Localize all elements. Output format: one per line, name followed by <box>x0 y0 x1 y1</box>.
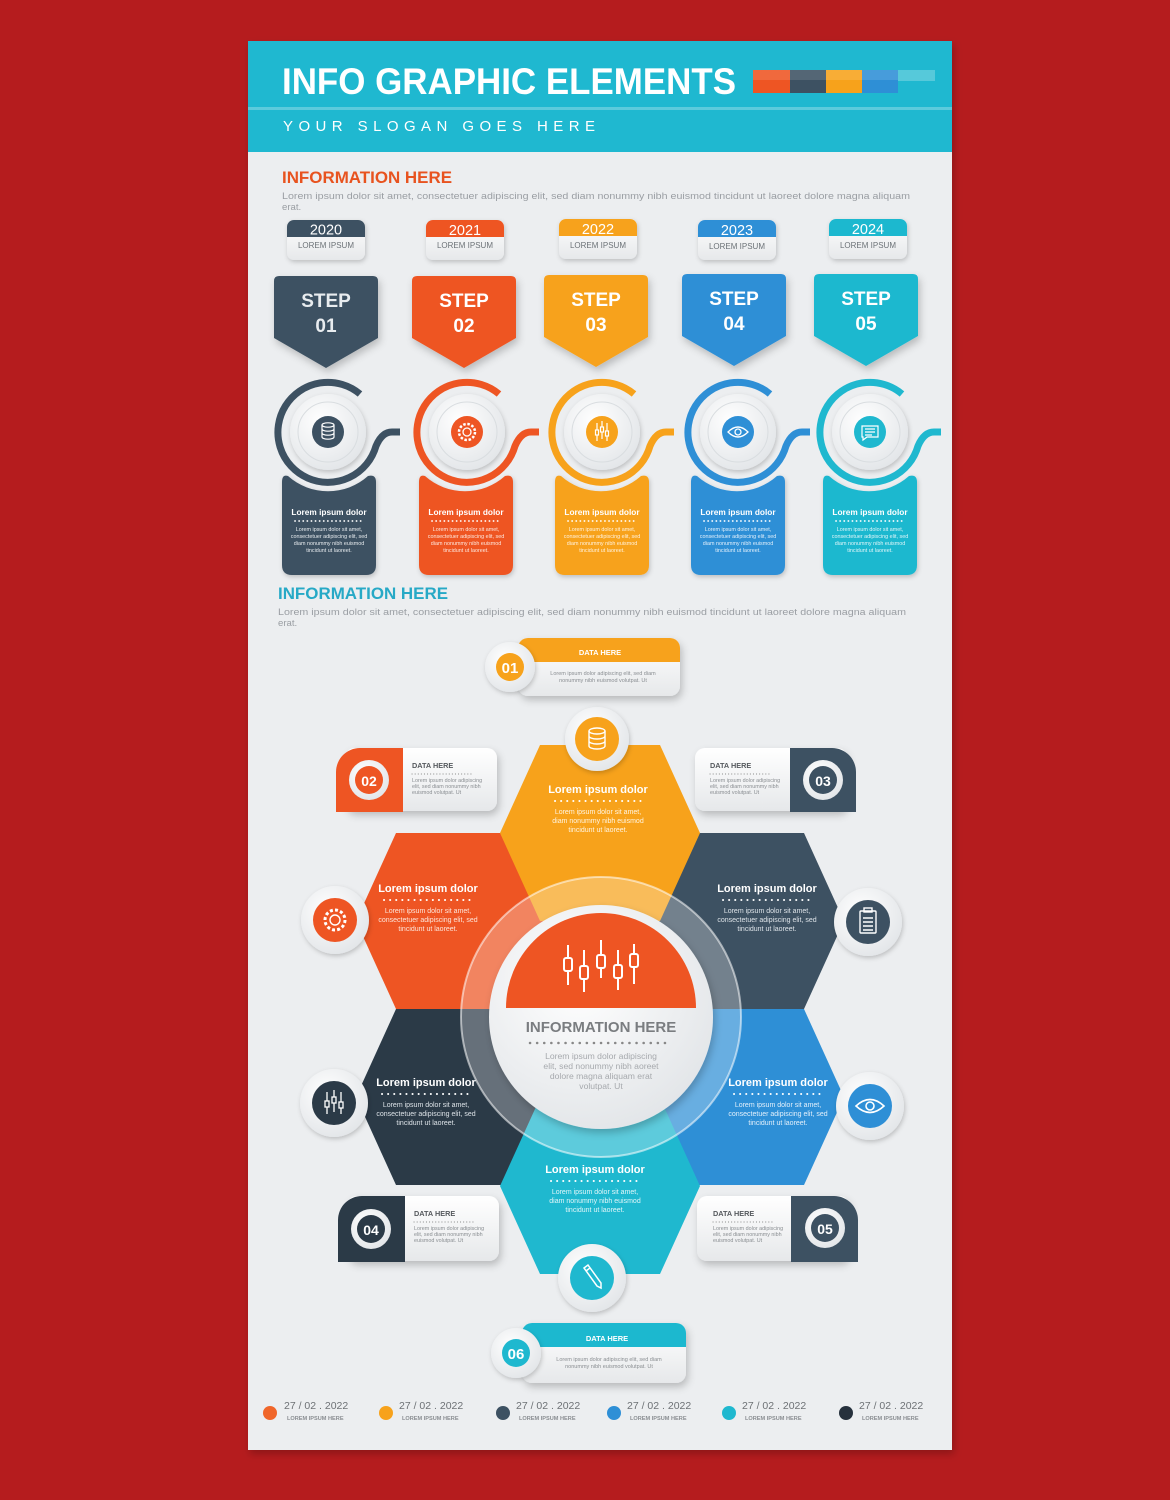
hex text: upper-left: Lorem ipsum dolor <box>378 883 479 895</box>
year tabs: LOREM IPSUM <box>709 242 765 251</box>
center circle: volutpat. Ut <box>579 1081 623 1091</box>
step 1 ring and card: consectetuer adipiscing elit, sed <box>291 534 367 540</box>
hex: lower-right blue <box>644 1009 844 1185</box>
step 2 ring and card: Lorem ipsum dolor sit amet, <box>433 527 500 533</box>
center circle: INFORMATION HERE <box>526 1019 676 1036</box>
hex icon: top database <box>565 707 629 771</box>
step badges: 04 <box>723 314 745 335</box>
year tabs: 2020 <box>310 222 342 238</box>
hex text: top: Lorem ipsum dolor <box>548 784 649 796</box>
data box 02: elit, sed diam nonummy nibh <box>412 784 481 790</box>
center circle: elit, sed nonummy nibh aoreet <box>543 1061 659 1071</box>
step 3 ring and card <box>552 382 674 575</box>
data box 05: 05 <box>817 1221 833 1237</box>
hex: lower-left navy <box>356 1009 556 1185</box>
hex icon: gear <box>301 886 369 954</box>
step 2 ring and card: tincidunt ut laoreet. <box>443 548 489 554</box>
bottom legend: 27 / 02 . 2022 <box>742 1400 806 1412</box>
step 2 ring and card: Lorem ipsum dolor <box>428 507 504 517</box>
data box 06: DATA HERE <box>586 1334 628 1343</box>
section heading 1 <box>282 169 910 213</box>
step 5 ring and card: Lorem ipsum dolor sit amet, <box>837 527 904 533</box>
hex icon: clipboard <box>834 888 902 956</box>
year tabs: 2022 <box>582 222 614 238</box>
data box 05: DATA HERE <box>713 1209 754 1218</box>
data box 05: euismod volutpat. Ut <box>713 1238 763 1244</box>
step 5 ring and card <box>820 382 941 575</box>
center circle <box>461 877 741 1157</box>
section heading 2: erat. <box>278 618 297 629</box>
data box 01: nonummy nibh euismod volutpat. Ut <box>559 678 647 684</box>
year tabs: 2024 <box>852 222 884 238</box>
hex icon: sliders dark <box>300 1069 368 1137</box>
data box 05: Lorem ipsum dolor adipiscing <box>713 1226 783 1232</box>
bottom legend: 27 / 02 . 2022 <box>859 1400 923 1412</box>
bottom legend: 27 / 02 . 2022 <box>627 1400 691 1412</box>
center circle: Lorem ipsum dolor adipiscing <box>545 1051 657 1061</box>
bottom legend: LOREM IPSUM HERE <box>745 1416 802 1422</box>
step 3 ring and card: Lorem ipsum dolor sit amet, <box>569 527 636 533</box>
hex text: top: tincidunt ut laoreet. <box>568 827 628 834</box>
hex text: lower-left: Lorem ipsum dolor sit amet, <box>383 1102 469 1109</box>
hex text: upper-right: Lorem ipsum dolor <box>717 883 818 895</box>
hex: top yellow <box>500 745 700 921</box>
section heading 2: INFORMATION HERE <box>278 585 448 603</box>
data box 06: 06 <box>508 1346 524 1363</box>
bottom legend: 27 / 02 . 2022 <box>284 1400 348 1412</box>
data box 05 <box>697 1196 858 1262</box>
color blocks <box>753 70 935 93</box>
step 5 ring and card: Lorem ipsum dolor <box>832 507 908 517</box>
data box 03: elit, sed diam nonummy nibh <box>710 784 779 790</box>
step 2 ring and card: consectetuer adipiscing elit, sed <box>428 534 504 540</box>
step badges: 03 <box>585 315 607 336</box>
step 5 ring and card: diam nonummy nibh euismod <box>835 541 905 547</box>
data box 01: Lorem ipsum dolor adipiscing elit, sed diam <box>550 671 656 677</box>
step 5 ring and card: consectetuer adipiscing elit, sed <box>832 534 908 540</box>
step 2 ring and card <box>417 382 539 575</box>
data box 02: DATA HERE <box>412 761 453 770</box>
data box 03: euismod volutpat. Ut <box>710 790 760 796</box>
data box 04 <box>338 1196 499 1262</box>
data box 06: nonummy nibh euismod volutpat. Ut <box>565 1364 653 1370</box>
data box 03 <box>695 748 856 812</box>
data box 04: euismod volutpat. Ut <box>414 1238 464 1244</box>
data box 03: Lorem ipsum dolor adipiscing <box>710 778 780 784</box>
page panel <box>248 41 952 1450</box>
bottom legend: LOREM IPSUM HERE <box>287 1416 344 1422</box>
section heading 2 <box>278 585 906 629</box>
year tabs: 2023 <box>721 223 753 239</box>
data box 02: Lorem ipsum dolor adipiscing <box>412 778 482 784</box>
step 2 ring and card: diam nonummy nibh euismod <box>431 541 501 547</box>
year tabs: LOREM IPSUM <box>298 241 354 250</box>
section heading 1: erat. <box>282 202 301 213</box>
bottom legend: LOREM IPSUM HERE <box>630 1416 687 1422</box>
hex text: lower-right: Lorem ipsum dolor sit amet, <box>735 1102 821 1109</box>
data box 02: euismod volutpat. Ut <box>412 790 462 796</box>
hex text: upper-right <box>717 883 818 933</box>
hex icon: eye <box>836 1072 904 1140</box>
step badges: 05 <box>855 314 877 335</box>
icon: chat bubble <box>862 426 878 440</box>
step badges: STEP <box>301 291 351 312</box>
step 4 ring and card: diam nonummy nibh euismod <box>703 541 773 547</box>
hex text: upper-left: tincidunt ut laoreet. <box>398 926 458 933</box>
step 1 ring and card: diam nonummy nibh euismod <box>294 541 364 547</box>
year tabs: 2021 <box>449 223 481 239</box>
bottom legend: LOREM IPSUM HERE <box>862 1416 919 1422</box>
icon: gear <box>459 424 475 440</box>
data box 03: 03 <box>815 773 831 789</box>
section heading 2: Lorem ipsum dolor sit amet, consectetuer adipiscing elit, sed diam nonummy nibh euismod tincidunt ut laoreet dolore magna aliquam <box>278 607 906 618</box>
step badges: STEP <box>571 290 621 311</box>
slogan: YOUR SLOGAN GOES HERE <box>283 118 595 135</box>
hex text: bottom: Lorem ipsum dolor sit amet, <box>552 1189 638 1196</box>
data box 03: DATA HERE <box>710 761 751 770</box>
step 3 ring and card: tincidunt ut laoreet. <box>579 548 625 554</box>
hex text: top <box>548 784 649 834</box>
hex text: upper-right: Lorem ipsum dolor sit amet, <box>724 908 810 915</box>
step badges: STEP <box>841 289 891 310</box>
icon: sliders <box>596 421 608 441</box>
step 4 ring and card <box>688 382 810 575</box>
hex text: upper-left <box>378 883 479 933</box>
hex text: top: diam nonummy nibh euismod <box>552 818 644 825</box>
hex text: upper-right: tincidunt ut laoreet. <box>737 926 797 933</box>
step 5 ring and card: tincidunt ut laoreet. <box>847 548 893 554</box>
data box 04: 04 <box>363 1222 379 1238</box>
step badges: STEP <box>439 291 489 312</box>
hex text: lower-left: tincidunt ut laoreet. <box>396 1120 456 1127</box>
data box 01: 01 <box>502 660 518 677</box>
hex text: bottom: tincidunt ut laoreet. <box>565 1207 625 1214</box>
title: INFO GRAPHIC ELEMENTS <box>282 61 736 102</box>
step 1 ring and card: Lorem ipsum dolor sit amet, <box>296 527 363 533</box>
step badges <box>274 274 918 368</box>
step 3 ring and card: Lorem ipsum dolor <box>564 507 640 517</box>
data box 06 <box>491 1323 686 1383</box>
data box 04: DATA HERE <box>414 1209 455 1218</box>
step 4 ring and card: tincidunt ut laoreet. <box>715 548 761 554</box>
hex text: upper-left: consectetuer adipiscing elit, sed <box>378 917 478 924</box>
icon: equalizer <box>564 940 638 992</box>
section heading 1: INFORMATION HERE <box>282 169 452 187</box>
step 3 ring and card: diam nonummy nibh euismod <box>567 541 637 547</box>
step 1 ring and card: Lorem ipsum dolor <box>291 507 367 517</box>
hex text: lower-left: Lorem ipsum dolor <box>376 1077 477 1089</box>
step 1 ring and card <box>278 382 400 575</box>
data box 01 <box>485 638 680 696</box>
step badges: 02 <box>453 316 475 337</box>
data box 02: 02 <box>361 773 377 789</box>
step badges: STEP <box>709 289 759 310</box>
bottom legend: 27 / 02 . 2022 <box>516 1400 580 1412</box>
hex text: bottom <box>545 1164 646 1214</box>
step badges: 01 <box>315 316 337 337</box>
hex: upper-left orange <box>356 833 556 1009</box>
hex icon: pencil <box>558 1244 626 1312</box>
hex text: bottom: diam nonummy nibh euismod <box>549 1198 641 1205</box>
hex: upper-right dark <box>644 833 844 1009</box>
icon: eye <box>728 427 748 437</box>
hex: bottom cyan <box>500 1098 700 1274</box>
hex text: lower-left: consectetuer adipiscing elit, sed <box>376 1111 476 1118</box>
hex text: lower-right: Lorem ipsum dolor <box>728 1077 829 1089</box>
bottom legend: LOREM IPSUM HERE <box>519 1416 576 1422</box>
step 1 ring and card: tincidunt ut laoreet. <box>306 548 352 554</box>
step 4 ring and card: Lorem ipsum dolor <box>700 507 776 517</box>
year tabs: LOREM IPSUM <box>840 241 896 250</box>
hex text: upper-left: Lorem ipsum dolor sit amet, <box>385 908 471 915</box>
hex text: lower-right: tincidunt ut laoreet. <box>748 1120 808 1127</box>
bottom legend: 27 / 02 . 2022 <box>399 1400 463 1412</box>
step 3 ring and card: consectetuer adipiscing elit, sed <box>564 534 640 540</box>
hex text: top: Lorem ipsum dolor sit amet, <box>555 809 641 816</box>
data box 02 <box>336 748 497 812</box>
hex text: upper-right: consectetuer adipiscing elit, sed <box>717 917 817 924</box>
center circle: dolore magna aliquam erat <box>550 1071 653 1081</box>
step 4 ring and card: Lorem ipsum dolor sit amet, <box>705 527 772 533</box>
data box 01: DATA HERE <box>579 648 621 657</box>
bottom legend: LOREM IPSUM HERE <box>402 1416 459 1422</box>
data box 04: elit, sed diam nonummy nibh <box>414 1232 483 1238</box>
hex text: lower-right <box>728 1077 829 1127</box>
hex text: lower-left <box>376 1077 477 1127</box>
year tabs: LOREM IPSUM <box>570 241 626 250</box>
year tabs <box>287 219 907 260</box>
hexagon cluster <box>356 745 844 1274</box>
icon: database <box>322 423 334 439</box>
header band <box>248 41 952 152</box>
hex text: lower-right: consectetuer adipiscing elit, sed <box>728 1111 828 1118</box>
data box 05: elit, sed diam nonummy nibh <box>713 1232 782 1238</box>
step 4 ring and card: consectetuer adipiscing elit, sed <box>700 534 776 540</box>
data box 04: Lorem ipsum dolor adipiscing <box>414 1226 484 1232</box>
bottom legend <box>263 1400 923 1422</box>
section heading 1: Lorem ipsum dolor sit amet, consectetuer adipiscing elit, sed diam nonummy nibh euismod tincidunt ut laoreet dolore magna aliquam <box>282 191 910 202</box>
year tabs: LOREM IPSUM <box>437 241 493 250</box>
data box 06: Lorem ipsum dolor adipiscing elit, sed diam <box>556 1357 662 1363</box>
hex text: bottom: Lorem ipsum dolor <box>545 1164 646 1176</box>
